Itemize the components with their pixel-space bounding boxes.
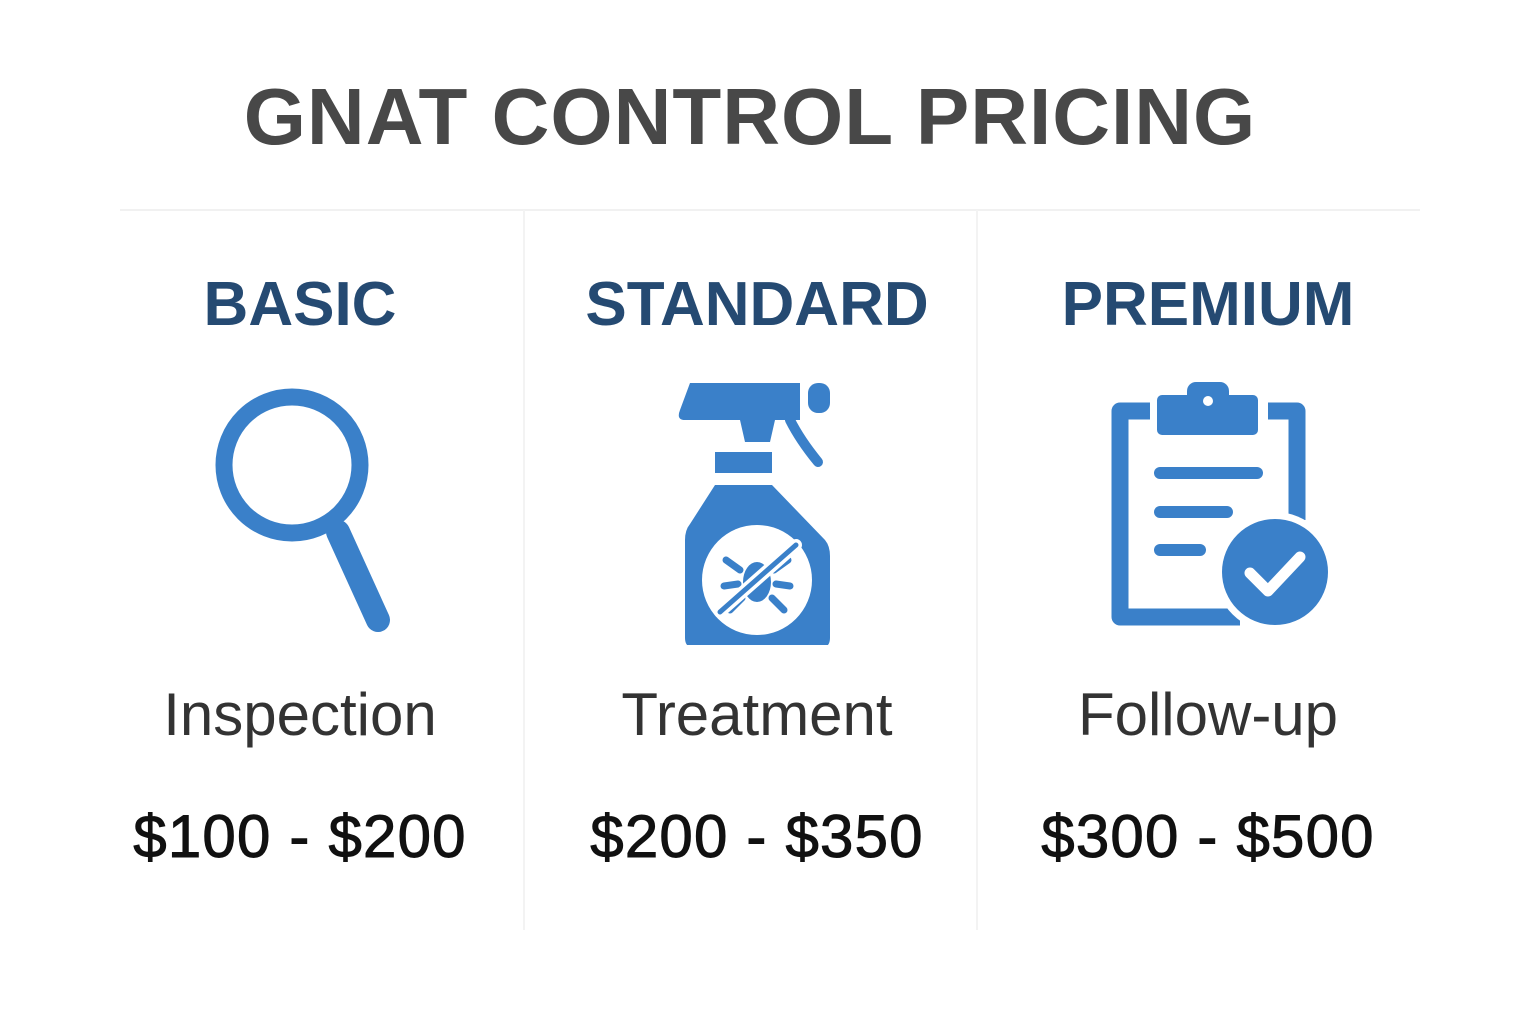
panel: basic <box>133 270 467 870</box>
price: basic: $100 - $200 <box>133 803 467 870</box>
heading: premium: PREMIUM <box>1062 270 1354 339</box>
icon: clipboard check <box>1112 382 1328 626</box>
label: treatment: Treatment <box>621 681 893 748</box>
label: follow-up: Follow-up <box>1078 681 1338 748</box>
icon: spray bottle <box>678 383 830 645</box>
icon: magnifier <box>216 388 390 632</box>
heading: standard: STANDARD <box>585 270 929 339</box>
panel: premium <box>1041 270 1375 870</box>
panel: standard <box>585 270 929 870</box>
price: premium: $300 - $500 <box>1041 803 1375 870</box>
label: inspection: Inspection <box>163 681 437 748</box>
heading: basic: BASIC <box>204 270 396 339</box>
price: standard: $200 - $350 <box>590 803 924 870</box>
title: GNAT CONTROL PRICING <box>244 72 1256 161</box>
